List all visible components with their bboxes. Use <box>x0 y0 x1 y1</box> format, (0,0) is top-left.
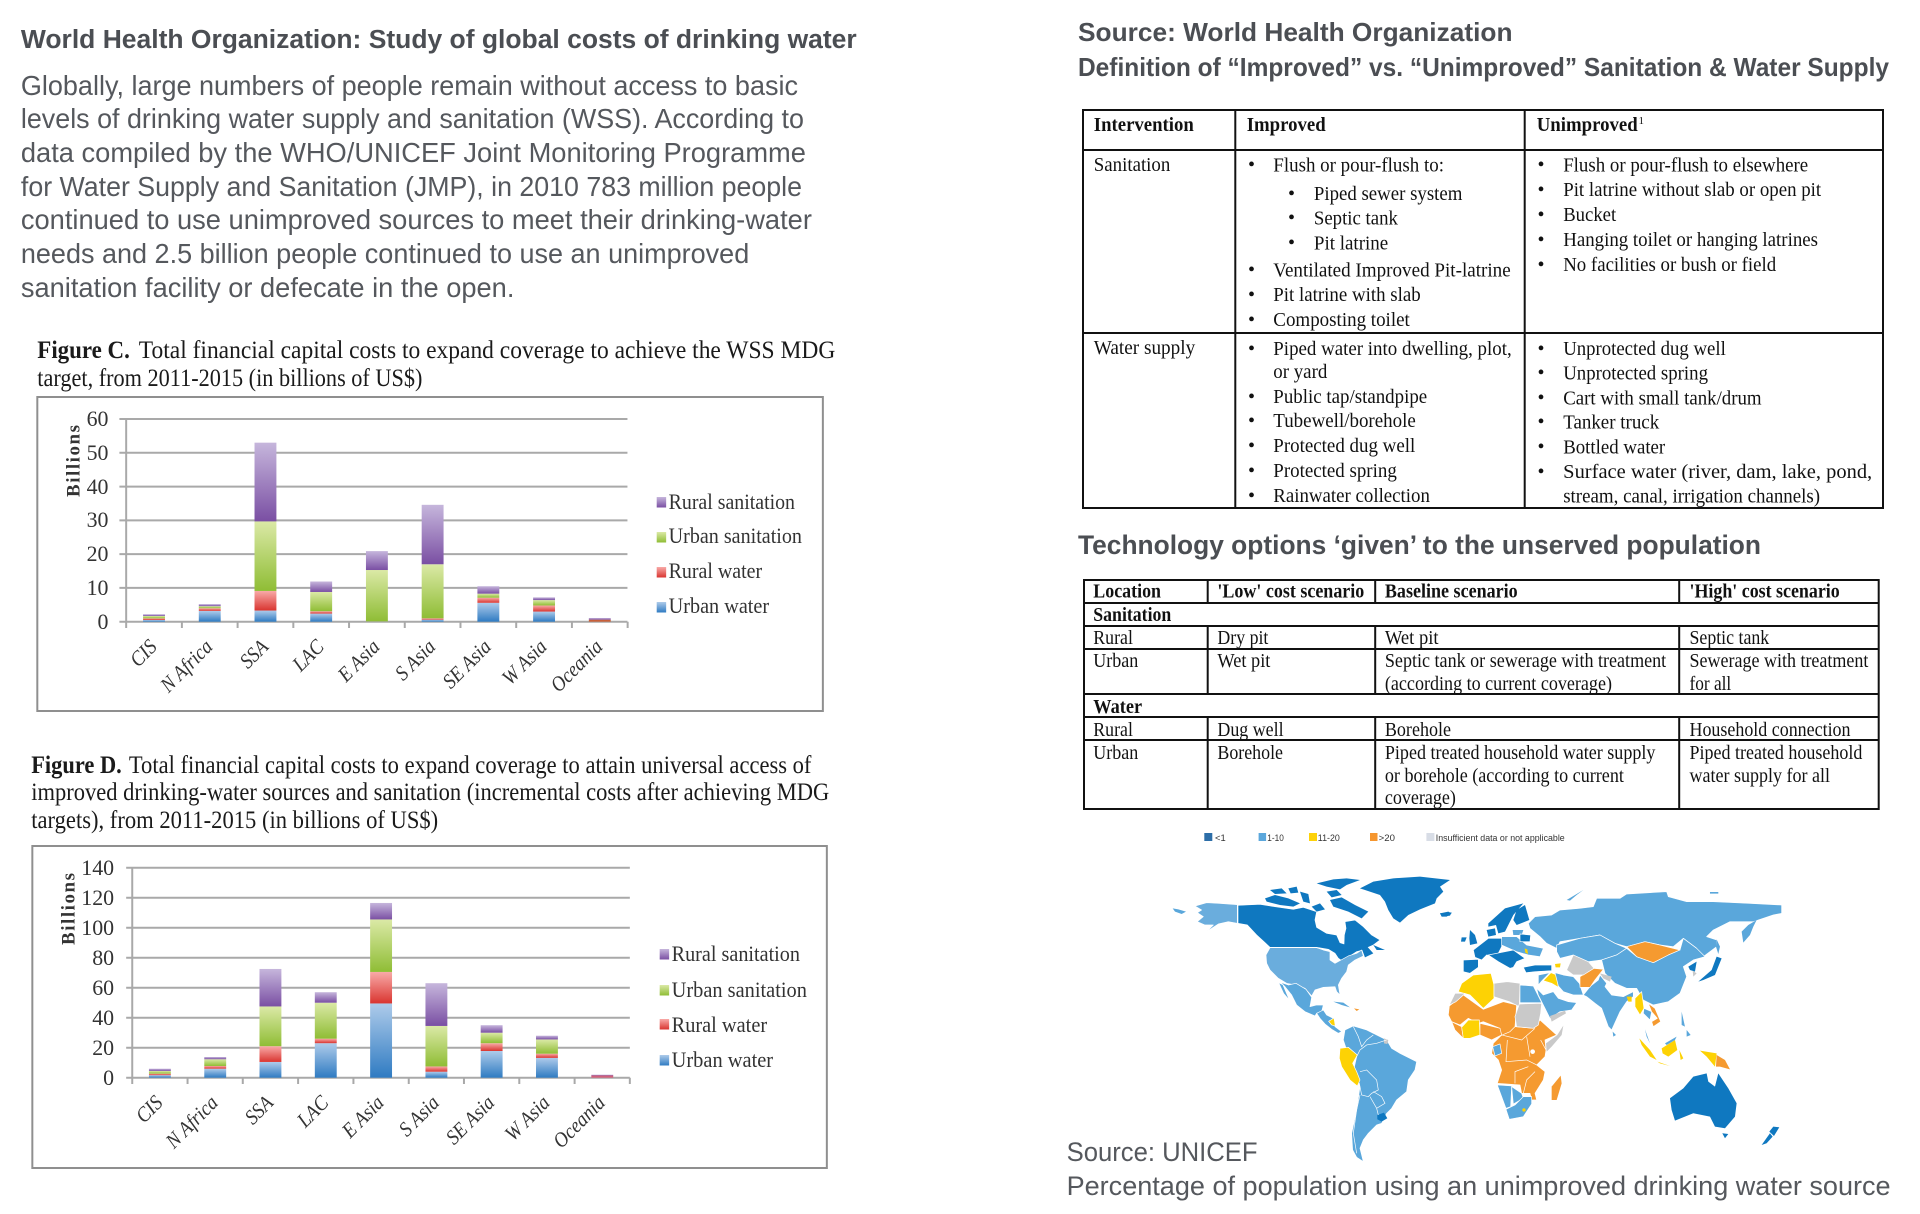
map legend: <1 <box>1215 833 1226 843</box>
x-axis labels: S Asia <box>391 635 440 685</box>
Russia <box>1528 892 1782 957</box>
sanitation row: No facilities or bush or field <box>1563 254 1776 276</box>
sanitation row: • <box>1248 154 1255 176</box>
y-axis labels: 80 <box>92 945 114 970</box>
heading: source and definition: Source: World Health Organization <box>1078 17 1512 47</box>
panel: Figure D stacked bar chart <box>32 846 827 1168</box>
column headers: 'High' cost scenario <box>1690 580 1840 602</box>
legend: Urban water <box>672 1047 774 1072</box>
x-axis labels: SE Asia <box>442 1091 499 1149</box>
y-axis labels: 60 <box>87 406 108 431</box>
water supply row: Tubewell/borehole <box>1273 410 1416 432</box>
x-axis labels: S Asia <box>394 1091 444 1141</box>
map legend: 1-10 <box>1267 833 1284 843</box>
x-axis labels: E Asia <box>333 635 385 687</box>
water supply row: Protected dug well <box>1273 435 1416 457</box>
table: improved vs unimproved <box>1083 110 1883 508</box>
y-axis labels <box>87 406 108 634</box>
caption: Figure C: Total financial capital costs to expand coverage to achieve the WSS MDG <box>139 337 835 364</box>
sanitation rows: Rural <box>1093 627 1133 649</box>
y-axis labels: 20 <box>87 541 108 566</box>
table: technology options <box>1084 580 1879 809</box>
text block: intro paragraph: data compiled by the WHO/UNICEF Joint Monitoring Programme <box>21 137 806 168</box>
legend: Urban sanitation <box>672 977 807 1002</box>
x-axis labels: W Asia <box>501 1091 555 1146</box>
water supply row: • <box>1538 387 1545 409</box>
left column <box>21 26 857 1168</box>
water supply row: • <box>1538 461 1545 483</box>
Europe <box>1502 937 1543 957</box>
legend <box>660 941 807 1072</box>
water supply row: stream, canal, irrigation channels) <box>1563 486 1820 508</box>
water rows: water supply for all <box>1690 765 1830 787</box>
x-axis labels: SE Asia <box>438 635 496 693</box>
sanitation row: Pit latrine without slab or open pit <box>1563 179 1822 201</box>
water supply row: Unprotected dug well <box>1563 338 1726 360</box>
caption: Figure C: target, from 2011-2015 (in billions of US$) <box>37 365 422 392</box>
y-axis labels: 40 <box>87 474 108 499</box>
water supply row: • <box>1538 436 1545 458</box>
sanitation row: • <box>1248 259 1255 281</box>
water rows: Urban <box>1093 742 1138 764</box>
text block: intro paragraph: levels of drinking water supply and sanitation (WSS). According to <box>21 103 804 134</box>
sanitation row: Hanging toilet or hanging latrines <box>1563 229 1818 251</box>
stacked bars <box>149 903 613 1078</box>
water rows <box>1093 696 1862 809</box>
y-axis labels: 10 <box>87 575 108 600</box>
x-axis labels: E Asia <box>337 1091 389 1143</box>
legend: Urban sanitation <box>669 523 802 548</box>
sanitation row: • <box>1288 183 1295 205</box>
x-axis labels: SSA <box>235 635 274 673</box>
text block: intro paragraph <box>21 70 812 303</box>
x-axis labels: N Africa <box>155 635 217 698</box>
sanitation row: Flush or pour-flush to elsewhere <box>1563 154 1808 176</box>
sanitation rows: Wet pit <box>1217 650 1271 672</box>
map legend: >20 <box>1379 833 1395 843</box>
sanitation row: Composting toilet <box>1273 309 1410 331</box>
water rows: coverage) <box>1385 787 1456 809</box>
water rows: Piped treated household water supply <box>1385 742 1655 764</box>
x-axis labels <box>125 635 608 698</box>
sanitation rows: Septic tank or sewerage with treatment <box>1385 650 1667 672</box>
x-axis labels: SSA <box>240 1091 279 1129</box>
x-axis labels: W Asia <box>498 635 552 690</box>
x-axis labels: CIS <box>131 1091 168 1128</box>
water rows: Borehole <box>1385 719 1451 741</box>
sanitation row: • <box>1538 179 1545 201</box>
sanitation rows: Wet pit <box>1385 627 1439 649</box>
sanitation row: Pit latrine with slab <box>1273 284 1421 306</box>
y-axis labels: 100 <box>81 915 114 940</box>
water supply row: Rainwater collection <box>1273 485 1430 507</box>
water supply row: • <box>1248 435 1255 457</box>
caption: Figure D: Figure D. <box>31 752 122 779</box>
y-axis title: Billions <box>64 425 85 497</box>
caption: Figure D: Total financial capital costs to expand coverage to attain universal access of <box>129 752 812 779</box>
table header row: Improved <box>1247 114 1326 136</box>
water rows: Borehole <box>1217 742 1283 764</box>
legend: Rural sanitation <box>669 489 795 514</box>
map: Europe, Asia, Africa, Oceania <box>1440 890 1782 1145</box>
sanitation row: Flush or pour-flush to: <box>1273 154 1444 176</box>
caption: Figure D: targets), from 2011-2015 (in billions of US$) <box>31 807 438 834</box>
sanitation row: Piped sewer system <box>1314 183 1463 205</box>
caption: Figure C: Figure C. <box>37 337 130 364</box>
water supply row: or yard <box>1273 361 1327 383</box>
stacked bars <box>143 443 611 622</box>
heading: technology options: Technology options ‘given’ to the unserved population <box>1078 530 1761 560</box>
y-axis labels: 0 <box>98 609 108 634</box>
legend: Rural sanitation <box>672 941 800 966</box>
text block: intro paragraph: needs and 2.5 billion people continued to use an unimproved <box>21 238 749 269</box>
sanitation rows: Dry pit <box>1217 627 1269 649</box>
legend <box>657 489 802 618</box>
map: Americas <box>1173 877 1452 1162</box>
water supply row: • <box>1538 411 1545 433</box>
water rows: Rural <box>1093 719 1133 741</box>
x-axis labels: LAC <box>288 635 329 677</box>
water rows: Water <box>1093 696 1142 718</box>
text block: intro paragraph: Globally, large numbers of people remain without access to basic <box>21 70 798 101</box>
column headers: Baseline scenario <box>1385 580 1518 602</box>
legend: Rural water <box>672 1012 768 1037</box>
Africa <box>1492 1020 1557 1100</box>
panel: Figure C stacked bar chart <box>37 397 823 711</box>
y-axis title: Billions <box>59 873 80 945</box>
x-axis labels: Oceania <box>549 1091 610 1153</box>
y-axis labels: 60 <box>92 975 114 1000</box>
sanitation rows: Sewerage with treatment <box>1690 650 1869 672</box>
sanitation row: • <box>1538 154 1545 176</box>
y-axis labels: 20 <box>92 1035 114 1060</box>
y-axis labels: 30 <box>87 507 108 532</box>
sanitation row: • <box>1538 204 1545 226</box>
water rows: Household connection <box>1690 719 1850 741</box>
sanitation row: • <box>1248 309 1255 331</box>
water supply row: • <box>1248 386 1255 408</box>
map legend <box>1204 833 1565 843</box>
sanitation rows: (according to current coverage) <box>1385 673 1612 695</box>
sanitation rows <box>1093 604 1869 695</box>
y-axis labels: 50 <box>87 440 108 465</box>
sanitation row <box>1094 154 1822 331</box>
map legend: 11-20 <box>1318 833 1340 843</box>
water supply row: Cart with small tank/drum <box>1563 388 1762 410</box>
heading: source and definition <box>1078 17 1889 82</box>
water rows: or borehole (according to current <box>1385 765 1624 787</box>
y-axis labels: 140 <box>81 855 114 880</box>
water supply row: Piped water into dwelling, plot, <box>1273 338 1512 360</box>
water supply row: Surface water (river, dam, lake, pond, <box>1563 461 1872 483</box>
table header row: 1 <box>1638 115 1644 127</box>
water supply row: • <box>1248 460 1255 482</box>
title: WHO study: World Health Organization: Study of global costs of drinking water <box>21 26 857 54</box>
sanitation row: • <box>1538 229 1545 251</box>
legend: Urban water <box>669 593 770 618</box>
y-axis labels: 40 <box>92 1005 114 1030</box>
heading: source and definition: Definition of “Improved” vs. “Unimproved” Sanitation & Water Supply <box>1078 52 1889 82</box>
water rows: Piped treated household <box>1690 742 1862 764</box>
water supply row: • <box>1248 338 1255 360</box>
sanitation row: • <box>1288 207 1295 229</box>
caption: map source <box>1067 1137 1891 1201</box>
legend: Rural water <box>669 558 763 583</box>
caption: Figure D: improved drinking-water sources and sanitation (incremental costs after achieving MDG <box>31 779 829 806</box>
Middle East and South Asia <box>1537 988 1577 1018</box>
column headers: Location <box>1093 580 1161 602</box>
water supply row: • <box>1248 410 1255 432</box>
world map: unimproved drinking water <box>1173 877 1782 1162</box>
table header row: Unimproved <box>1537 114 1638 136</box>
table header row <box>1094 114 1644 136</box>
water supply row: • <box>1248 485 1255 507</box>
sanitation row: Bucket <box>1563 204 1617 226</box>
caption: Figure C <box>37 337 835 392</box>
water supply row: Protected spring <box>1273 460 1397 482</box>
x-axis labels: CIS <box>125 635 162 672</box>
water supply row: • <box>1538 362 1545 384</box>
sanitation row: • <box>1288 232 1295 254</box>
y-axis labels <box>81 855 114 1090</box>
column headers: 'Low' cost scenario <box>1217 580 1364 602</box>
column headers <box>1093 580 1840 602</box>
sanitation row: • <box>1248 284 1255 306</box>
water supply row: Water supply <box>1094 337 1195 359</box>
water supply row: Bottled water <box>1563 436 1666 458</box>
sanitation row: Pit latrine <box>1314 232 1388 254</box>
y-axis labels: 120 <box>81 885 114 910</box>
x-axis labels: N Africa <box>161 1091 223 1154</box>
sanitation row: Ventilated Improved Pit-latrine <box>1273 260 1511 282</box>
table header row: Intervention <box>1094 114 1194 136</box>
sanitation rows: Sanitation <box>1093 604 1171 626</box>
caption: Figure D <box>31 752 829 834</box>
text block: intro paragraph: continued to use unimproved sources to meet their drinking-water <box>21 204 812 235</box>
water supply row <box>1094 337 1872 508</box>
sanitation rows: Urban <box>1093 650 1138 672</box>
x-axis labels <box>131 1091 610 1154</box>
text block: intro paragraph: for Water Supply and Sanitation (JMP), in 2010 783 million people <box>21 171 802 202</box>
sanitation rows: Septic tank <box>1690 627 1769 649</box>
water supply row: • <box>1538 338 1545 360</box>
x-axis labels: Oceania <box>546 635 608 697</box>
water supply row: Public tap/standpipe <box>1273 386 1427 408</box>
water supply row: Tanker truck <box>1563 412 1659 434</box>
text block: intro paragraph: sanitation facility or defecate in the open. <box>21 272 514 303</box>
sanitation row: • <box>1538 254 1545 276</box>
Southeast Asia <box>1635 992 1644 1015</box>
water rows: Dug well <box>1217 719 1284 741</box>
water supply row: Unprotected spring <box>1563 362 1708 384</box>
caption: map source: Source: UNICEF <box>1067 1137 1258 1167</box>
sanitation row: Septic tank <box>1314 208 1398 230</box>
Australia and New Zealand <box>1670 1073 1737 1128</box>
x-axis labels: LAC <box>292 1091 334 1133</box>
caption: map source: Percentage of population using an unimproved drinking water source <box>1067 1171 1891 1201</box>
map legend: Insufficient data or not applicable <box>1436 833 1565 843</box>
y-axis labels: 0 <box>103 1065 114 1090</box>
sanitation rows: for all <box>1690 673 1732 695</box>
sanitation row: Sanitation <box>1094 154 1170 176</box>
